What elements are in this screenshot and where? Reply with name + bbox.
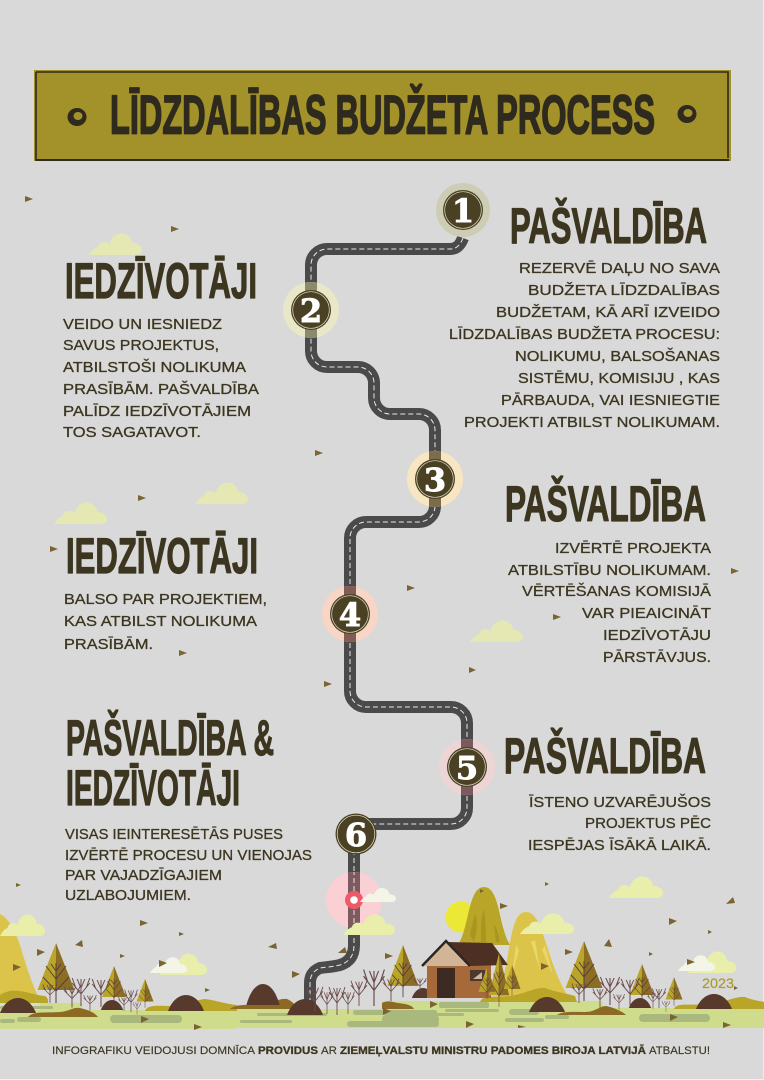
mountain: front (497, 912, 569, 998)
heading: Iedzīvotāji: IEDZĪVOTĀJI (65, 253, 257, 309)
description: PĀRBAUDA, VAI IESNIEGTIE (501, 392, 720, 409)
heading: Pašvaldība un iedzīvotāji: IEDZĪVOTĀJI (66, 760, 240, 816)
step 6 text (65, 709, 312, 904)
title banner (34, 70, 731, 161)
description: ATBILSTĪBU NOLIKUMAM. (508, 562, 711, 579)
landscape foreground (0, 196, 739, 1030)
description: VĒRTĒŠANAS KOMISIJĀ (522, 583, 711, 600)
heading: Iedzīvotāji: IEDZĪVOTĀJI (66, 528, 258, 584)
description (449, 260, 720, 431)
ornament: left (68, 108, 86, 126)
description: NOLIKUMU, BALSOŠANAS (515, 348, 720, 365)
description (64, 591, 267, 653)
step 6 marker (336, 814, 376, 854)
house (422, 941, 508, 998)
step 3 text (505, 475, 711, 666)
description: VEIDO UN IESNIEDZ (63, 316, 222, 333)
description: ĪSTENO UZVARĒJUŠOS (529, 794, 711, 811)
description: BALSO PAR PROJEKTIEM, (64, 591, 267, 608)
road (310, 238, 467, 1012)
small flying birds (13, 196, 739, 1030)
clouds lower area (0, 888, 736, 975)
olive bumps (0, 988, 764, 1011)
description: PROJEKTI ATBILST NOLIKUMAM. (464, 414, 720, 431)
description: TOS SAGATAVOT. (63, 424, 201, 441)
footer credit (52, 1045, 710, 1057)
footer credit: PROVIDUS (258, 1045, 318, 1057)
description (508, 540, 711, 666)
description: SAVUS PROJEKTUS, (63, 337, 219, 354)
description: SISTĒMU, KOMISIJU , KAS (518, 370, 720, 387)
description: PAR VAJADZĪGAJIEM (65, 867, 222, 884)
mounds (0, 984, 732, 1015)
description: IZVĒRTĒ PROCESU UN VIENOJAS (65, 847, 312, 864)
description: BUDŽETA LĪDZDALĪBAS (528, 282, 720, 299)
step 4 marker (322, 584, 378, 644)
icon: location pin (345, 891, 363, 909)
step 2 text (63, 253, 259, 441)
description (65, 826, 312, 904)
sun (446, 902, 476, 932)
description: PRASĪBĀM. PAŠVALDĪBA (63, 381, 259, 398)
step 2 marker (283, 280, 339, 340)
footer credit: ATBALSTU! (649, 1045, 710, 1057)
step 5 text (504, 727, 711, 854)
step 2 marker: 2 (300, 292, 322, 330)
footer credit: INFOGRAFIKU VEIDOJUSI DOMNĪCA (52, 1045, 256, 1057)
step 4 text (64, 528, 267, 653)
description: PRASĪBĀM. (64, 636, 153, 653)
mountain: back (458, 887, 510, 945)
step 5 marker: 5 (456, 749, 478, 787)
step 1 marker: 1 (452, 192, 474, 230)
description: VAR PIEAICINĀT (582, 605, 711, 622)
description: ATBILSTOŠI NOLIKUMA (63, 359, 246, 376)
description: BUDŽETAM, KĀ ARĪ IZVEIDO (496, 304, 720, 321)
pin halo (326, 870, 382, 930)
description (63, 316, 259, 441)
ornament: right (678, 105, 696, 123)
description: PALĪDZ IEDZĪVOTĀJIEM (63, 403, 251, 420)
step 4 marker: 4 (339, 596, 361, 634)
footer credit: AR (321, 1045, 337, 1057)
clouds upper area (54, 233, 663, 898)
step 3 marker: 3 (424, 461, 446, 499)
description: UZLABOJUMIEM. (65, 887, 191, 904)
landscape scenery (0, 233, 764, 1029)
heading: Pašvaldība un iedzīvotāji (66, 709, 274, 816)
description: PĀRSTĀVJUS. (603, 649, 711, 666)
ground (0, 1001, 764, 1029)
description: IZVĒRTĒ PROJEKTA (555, 540, 711, 557)
trees (38, 941, 683, 1008)
heading: Pašvaldība un iedzīvotāji: PAŠVALDĪBA & (66, 709, 274, 766)
brown bumps (28, 999, 626, 1017)
description: LĪDZDALĪBAS BUDŽETA PROCESU: (449, 326, 720, 343)
bare trees (43, 970, 670, 1015)
description: IEDZĪVOTĀJU (603, 627, 711, 644)
description: PROJEKTUS PĒC (585, 815, 711, 832)
step 3 marker (407, 449, 463, 509)
step 1 text (449, 197, 720, 431)
description: VISAS IEINTERESĒTĀS PUSES (65, 826, 283, 843)
year label: 2023 (702, 975, 734, 991)
description: REZERVĒ DAĻU NO SAVA (519, 260, 720, 277)
step 1 marker (436, 183, 490, 237)
step 6 marker: 6 (345, 816, 367, 854)
step 5 marker (439, 737, 495, 797)
description: KAS ATBILST NOLIKUMA (64, 613, 257, 630)
description: IESPĒJAS ĪSĀKĀ LAIKĀ. (528, 837, 711, 854)
footer credit: ZIEMEĻVALSTU MINISTRU PADOMES BIROJA LATVIJĀ (340, 1045, 646, 1057)
mountain: left (0, 914, 40, 1000)
description (528, 794, 711, 854)
ground stripes (0, 1002, 710, 1027)
